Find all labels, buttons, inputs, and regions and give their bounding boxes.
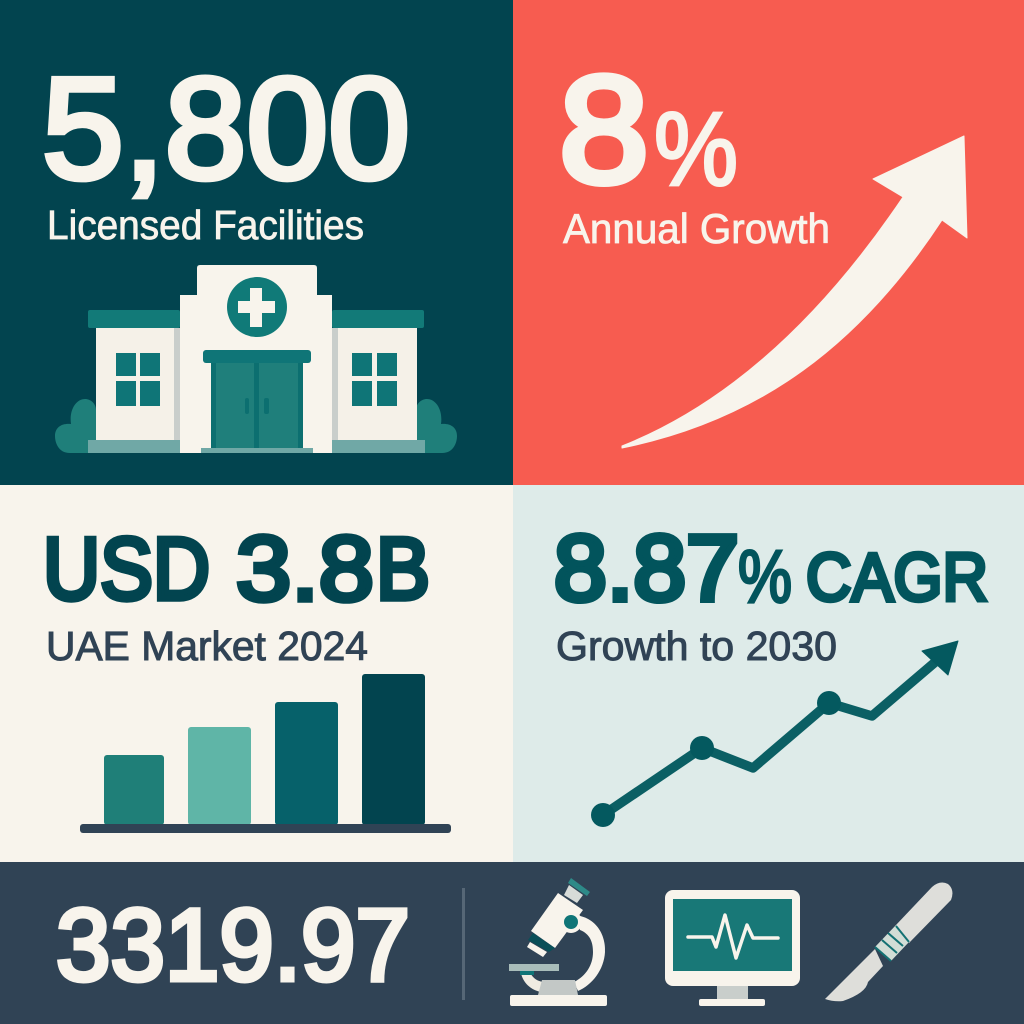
panel: licensed facilities	[0, 0, 513, 485]
line chart with arrow	[591, 641, 958, 827]
icon: hospital building	[55, 265, 457, 453]
stat: USD 3.8B: USD	[43, 519, 210, 618]
stat: USD 3.8B: 3.8	[236, 518, 374, 620]
stat: percent sign: %	[738, 535, 792, 618]
panel: UAE market	[0, 485, 513, 862]
stat: CAGR: CAGR	[806, 540, 988, 616]
label: growth to 2030: Growth to 2030	[556, 623, 837, 669]
icon: microscope	[509, 878, 607, 1006]
label: UAE market 2024: UAE Market 2024	[46, 623, 368, 669]
panel: CAGR	[513, 485, 1024, 862]
stat: 5,800: 5,800	[42, 48, 410, 209]
bar chart	[80, 674, 451, 833]
stat: USD 3.8B	[43, 518, 430, 620]
stat: 8.87: 8.87	[554, 516, 739, 620]
icon: heart monitor	[665, 890, 800, 1006]
label: annual growth: Annual Growth	[563, 205, 830, 252]
label: licensed facilities: Licensed Facilities	[47, 202, 364, 248]
arrow: rising curve	[622, 136, 967, 448]
icon: scalpel	[825, 883, 952, 1001]
stat: 8: 8	[559, 45, 649, 215]
stat: percent sign: %	[654, 92, 738, 208]
stat: 3319.97: 3319.97	[56, 888, 410, 1002]
panel: bottom bar	[0, 862, 1024, 1024]
panel: annual growth	[513, 0, 1024, 485]
stat: USD 3.8B: B	[376, 519, 430, 618]
